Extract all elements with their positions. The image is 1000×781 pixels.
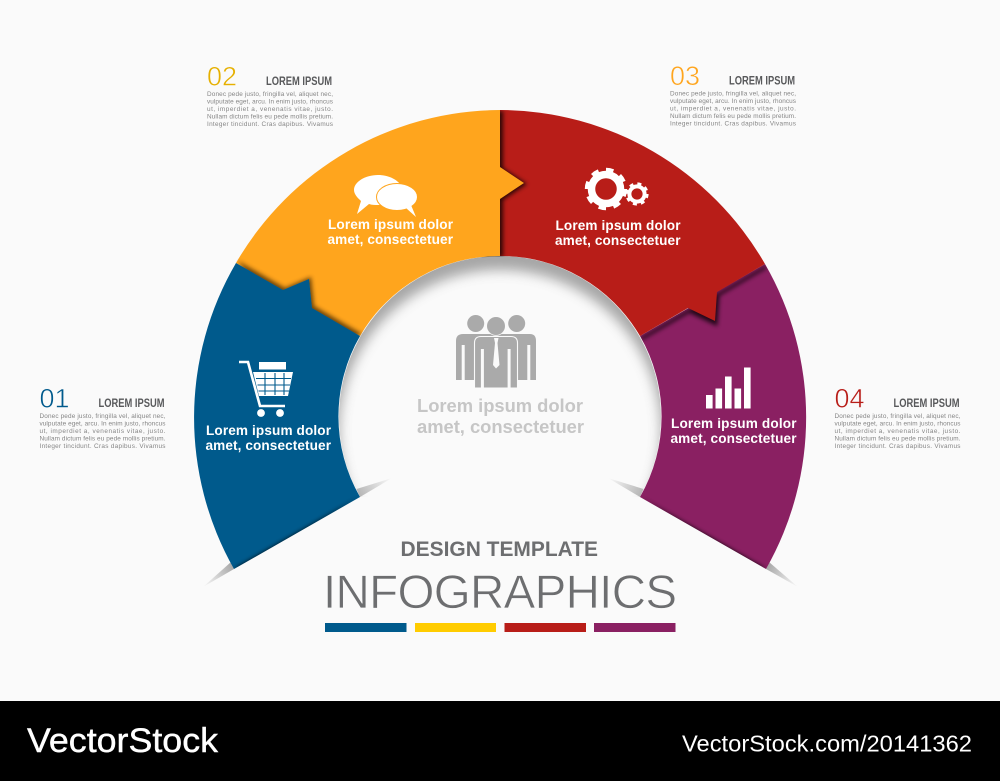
text block 03: Nullam dictum felis eu pede mollis pretium. [670,113,796,120]
text block 04: ut, imperdiet a, venenatis vitae, justo. [834,428,961,435]
text block 03: Integer tincidunt. Cras dapibus. Vivamus [670,120,796,127]
edge shadows on background [203,478,798,587]
subtitle: DESIGN TEMPLATE [400,538,598,561]
icon: business team [456,315,536,388]
text block 04: LOREM IPSUM [894,396,960,410]
text block 01: Integer tincidunt. Cras dapibus. Vivamus [40,443,166,450]
text block 03: LOREM IPSUM [729,73,795,87]
text block 02: vulputate eget, arcu. In enim justo, rhoncus [207,98,333,106]
text block 04: Nullam dictum felis eu pede mollis pretium. [834,436,961,442]
text block 01 [40,384,166,450]
caption: segment 02: Lorem ipsum dolor [328,217,454,232]
icon: shopping cart [239,362,293,417]
text block 04 [834,384,961,450]
caption: segment 01: amet, consectetuer [206,438,332,453]
text block 02: Integer tincidunt. Cras dapibus. Vivamus [207,121,333,128]
color key bars [325,623,676,632]
text block 01: 01 [40,384,70,414]
panel: segment 04 purple [640,264,806,569]
text block 04: 04 [834,384,864,414]
text block 04: vulputate eget, arcu. In enim justo, rhoncus [834,420,960,428]
text block 02: Donec pede justo, fringilla vel, aliquet nec, [207,91,333,98]
shadow cast by red segment [641,267,766,339]
image id: VectorStock.com/20141362 [682,730,972,756]
caption: segment 03: amet, consectetuer [555,233,681,248]
panel: segment 03 red [500,110,765,336]
caption: segment 04: amet, consectetuer [670,431,797,446]
text block 02: Nullam dictum felis eu pede mollis pretium. [207,114,333,120]
text block 03: vulputate eget, arcu. In enim justo, rhoncus [670,98,796,105]
caption: segment 03: Lorem ipsum dolor [556,218,681,233]
text block 01: vulputate eget, arcu. In enim justo, rhoncus [40,420,166,428]
text block 04: Donec pede justo, fringilla vel, aliquet nec, [834,413,961,420]
text block 02: LOREM IPSUM [266,74,332,88]
center caption: amet, consectetuer [417,416,584,437]
text block 01: ut, imperdiet a, venenatis vitae, justo. [40,428,166,435]
text block 03: 03 [670,61,700,91]
caption: segment 04: Lorem ipsum dolor [671,416,797,431]
text block 01: Nullam dictum felis eu pede mollis pretium. [40,436,166,442]
text block 04: Integer tincidunt. Cras dapibus. Vivamus [834,443,960,450]
shadow along blue bottom edge [234,497,360,569]
text block 01: LOREM IPSUM [98,396,164,410]
text block 01: Donec pede justo, fringilla vel, aliquet nec, [40,413,166,420]
watermark band [0,701,1000,781]
shadow along purple bottom edge [640,497,766,569]
text block 03: ut, imperdiet a, venenatis vitae, justo. [670,105,796,112]
shadow cast by orange segment [483,111,527,257]
shadow cast by blue segment [236,260,363,339]
text block 02 [207,62,333,128]
panel: segment 01 blue [194,263,360,569]
caption: segment 02: amet, consectetuer [328,232,454,247]
text block 03: Donec pede justo, fringilla vel, aliquet nec, [670,90,796,97]
icon: gears [587,170,647,208]
title: INFOGRAPHICS [323,566,677,619]
text block 02: ut, imperdiet a, venenatis vitae, justo. [207,106,333,113]
center caption: Lorem ipsum dolor [417,395,583,416]
text block 03 [670,61,796,127]
icon: bar chart [706,368,751,408]
text block 02: 02 [207,62,237,92]
brand name: VectorStock [27,722,219,760]
panel: segment 02 orange [236,110,524,336]
caption: segment 01: Lorem ipsum dolor [206,423,332,438]
icon: speech bubbles [354,175,418,217]
inner circle shadow [339,256,661,497]
